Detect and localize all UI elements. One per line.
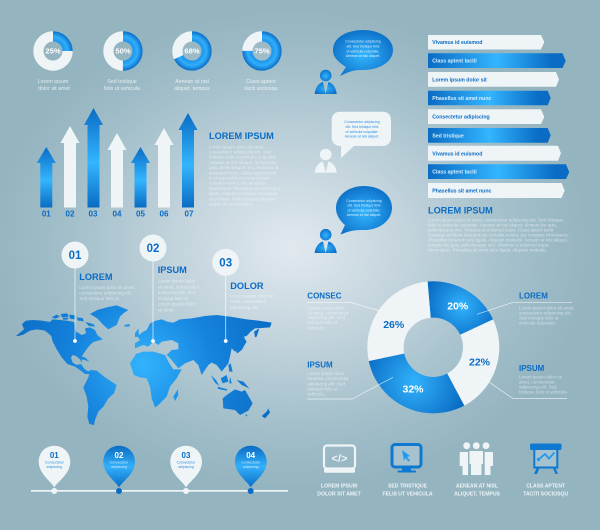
callout: consec: CONSEC <box>307 292 342 300</box>
icon: laptop code <box>317 446 362 498</box>
donut 25%: Lorem ipsum <box>38 79 69 85</box>
callout: ipsum left <box>307 360 393 399</box>
arrow chart <box>37 108 197 218</box>
text block: arrow chart description: Aenean at nisl aliquet, tempus leo <box>209 160 277 165</box>
map pin 03: 03 <box>219 257 232 269</box>
donut 50% <box>104 36 140 92</box>
callout: ipsum left: IPSUM <box>307 360 333 370</box>
ribbon 4: Phasellus sit amet nunc <box>432 96 492 102</box>
callout: lorem: Sed tristique felis ut <box>519 316 559 320</box>
callout: ipsum right: IPSUM <box>519 364 545 373</box>
blue speech bubble 2: Aenean at nisi aliquet. <box>347 213 381 217</box>
donut 68%: aliquet, tempus <box>174 86 210 92</box>
timeline pin 02: 02 <box>115 451 124 460</box>
timeline pin 03: adipiscing <box>178 465 194 469</box>
ribbon 9: Phasellus sit amet nunc <box>432 188 492 194</box>
arrow 01: 01 <box>42 210 51 218</box>
white speech bubble <box>332 112 391 158</box>
timeline pin 04: adipiscing <box>243 465 259 469</box>
blue speech bubble 1 <box>333 30 393 76</box>
ribbon 2: Class aptent taciti <box>432 58 477 64</box>
text block: arrow chart description: quis, pellentesque orci. Vivamus id <box>209 165 279 170</box>
blue speech bubble 2: ut vehicula vulputate. <box>348 208 380 212</box>
donut 25%: dolor sit amet <box>38 86 70 92</box>
text block: arrow chart description: sociosqu ad litora torquent per <box>209 176 270 180</box>
text block: arrow chart description: augue id sem porttitor. <box>209 202 254 206</box>
callout: lorem: LOREM <box>519 292 548 300</box>
icon: monitor cursor <box>382 444 433 498</box>
map pin 02: sit amet, consectetur <box>158 284 200 289</box>
map pin 02: Lorem ipsum dolor <box>158 302 195 307</box>
blue speech bubble 1: ut vehicula vulputate. <box>347 49 379 53</box>
map pin 01: consectetur adipiscing elit. <box>79 291 132 296</box>
icon: three people: AENEAN AT NISL <box>456 484 498 490</box>
blue speech bubble 2: elit. Sed tristique felis <box>347 204 381 208</box>
icon: presentation board <box>523 444 568 498</box>
donut 75%: taciti sociosqu <box>244 86 278 92</box>
donut 68%: 68% <box>184 47 200 56</box>
ribbon 6: Sed tristique <box>432 134 464 140</box>
arrow 03 <box>84 108 103 218</box>
text block: ribbon description: tempus leo quis, pellentesque orci. Vivamus id euismod turpis. <box>428 242 550 248</box>
callout: lorem: vehicula vulputate. <box>519 320 556 326</box>
callout: consec <box>307 292 380 330</box>
donut 25% <box>38 36 70 92</box>
icon: blue person 1 <box>315 70 337 94</box>
donut 25%: 25% <box>45 47 61 56</box>
arrow 06 <box>154 128 174 218</box>
map pin 01 <box>62 242 135 343</box>
callout: consec: sit amet, consectetur <box>307 310 349 315</box>
arrow 01 <box>37 147 56 218</box>
icon: three people: ALIQUET, TEMPUS <box>454 492 501 498</box>
icon: presentation board: TACITI SOCIOSQU <box>523 492 568 498</box>
donut chart <box>367 281 499 413</box>
arrow 02 <box>60 126 80 218</box>
callout: consec: tristique felis ut <box>307 320 338 325</box>
ribbon 7 <box>428 146 561 161</box>
map pin 03: adipiscing elit. <box>230 305 259 310</box>
callout: consec: Lorem ipsum dolor <box>307 306 345 310</box>
blue speech bubble 2 <box>336 186 392 234</box>
callout: lorem: consectetur adipiscing elit. <box>519 311 572 316</box>
arrow 04: 04 <box>113 210 122 218</box>
callout: lorem: Lorem ipsum dolor sit amet, <box>519 306 575 310</box>
icon: monitor cursor: FELIS UT VEHICULA <box>382 492 433 498</box>
ribbon 8 <box>428 164 569 179</box>
white speech bubble: Consectetur adipiscing <box>344 120 380 124</box>
icon: laptop code: DOLOR SIT AMET <box>317 492 362 498</box>
map pin 02 <box>140 234 200 343</box>
callout: ipsum right: adipiscing elit. Sed <box>519 385 557 390</box>
map: Americas and Greenland <box>16 305 130 425</box>
ribbon 1: Vivamus id euismod <box>432 40 482 46</box>
arrow 04 <box>108 133 126 218</box>
timeline pin 04: 04 <box>246 451 256 460</box>
map pin 03: DOLOR <box>230 281 264 291</box>
icon: white person <box>315 149 337 173</box>
callout: ipsum right: tristique felis ut vehicula <box>519 390 567 395</box>
icon: blue person 2 <box>315 229 337 253</box>
segment 22%: 22% <box>469 356 491 368</box>
text block: ribbon description: Himenaeos. Phasellus sit amet nunc ligula. Aliquam molestie. <box>428 248 547 252</box>
ribbon 3 <box>428 72 559 87</box>
timeline pin 01: Consectetur <box>45 461 65 465</box>
map pin 01: 01 <box>69 250 82 262</box>
arrow 07: 07 <box>185 210 194 218</box>
map pin 02: IPSUM <box>158 265 187 275</box>
text block: arrow chart description: ligula. Aliquam molestie accumsan <box>209 191 278 196</box>
white speech bubble: elit. Sed tristique felis <box>345 125 379 129</box>
timeline pin 04 <box>235 446 267 494</box>
map pin 02: 02 <box>147 243 159 255</box>
callout: ipsum left: Lorem ipsum dolor <box>307 371 345 376</box>
map pin 03: amet, consectetur <box>230 299 267 304</box>
arrow 03: 03 <box>89 210 98 218</box>
donut 50%: felis ut vehicula <box>104 86 140 92</box>
map pin 03 <box>212 249 274 343</box>
text block: arrow chart description: euismod turpis. Class aptent taciti <box>209 170 276 176</box>
blue speech bubble 1: Aenean at nisi aliquet. <box>346 54 380 58</box>
timeline pin 03: Consectetur <box>177 461 196 465</box>
callout: ipsum left: adipiscing elit. Sed <box>307 381 345 386</box>
blue speech bubble 1: elit. Sed tristique felis <box>346 44 380 48</box>
timeline pin 01: 01 <box>50 451 59 460</box>
text block: arrow chart description: accumsan. Pellentesque pharetra <box>209 196 277 202</box>
white speech bubble: ut vehicula vulputate. <box>346 130 378 134</box>
timeline pin 02: adipiscing <box>111 465 127 469</box>
callout: ipsum right: amet, consectetur <box>519 380 555 385</box>
icon: three people <box>454 442 501 498</box>
donut 50%: Sed tristique <box>107 79 137 85</box>
white speech bubble: Aenean at nisi aliquet. <box>345 134 379 138</box>
callout: ipsum left: tristique felis ut <box>307 386 338 391</box>
map pin 02: tristique felis ut. <box>158 296 189 301</box>
timeline pin 01 <box>39 446 70 494</box>
callout: ipsum left: vehicula. <box>307 391 325 396</box>
donut 68% <box>174 36 210 92</box>
map: Eurasia, Africa and Oceania <box>130 315 272 418</box>
map pin 02: adipiscing elit. Sed <box>158 290 196 295</box>
segment 20%: 20% <box>447 301 469 313</box>
arrow 05 <box>131 147 150 218</box>
icon: laptop code: LOREM IPSUM <box>321 484 357 490</box>
icon: laptop code: </> <box>332 453 347 465</box>
donut 75% <box>244 36 278 92</box>
ribbon 4 <box>428 91 551 105</box>
text block: ribbon description: Lorem ipsum dolor sit amet, consectetur adipiscing elit. Sed tristique <box>428 218 563 222</box>
world map <box>16 305 272 425</box>
ribbon 3: Lorem ipsum dolor sit <box>432 77 487 83</box>
text block: arrow chart description: tristique felis ut vehicula vulputate. <box>209 155 278 160</box>
icon: monitor cursor: SED TRISTIQUE <box>388 484 428 490</box>
map pin 01: Lorem ipsum dolor sit amet, <box>79 285 135 290</box>
arrow 07 <box>178 113 198 218</box>
icon: presentation board: CLASS APTENT <box>526 484 566 490</box>
timeline pin 03: 03 <box>182 451 191 460</box>
timeline pin 02: Consectetur <box>110 461 129 465</box>
ribbon 7: Vivamus id euismod <box>432 152 482 158</box>
ribbon 6 <box>428 128 551 143</box>
blue speech bubble 2: Consectetur adipiscing <box>346 199 382 203</box>
ribbon 8: Class aptent taciti <box>432 170 477 176</box>
text block: ribbon description: pellentesque orci. Vivamus id euismod turpis. Class aptent taciti <box>428 228 553 232</box>
map pin 02: sit amet. <box>158 308 175 312</box>
ribbon 9 <box>428 183 565 198</box>
arrow 05: 05 <box>136 210 145 218</box>
ribbon 1 <box>428 35 544 50</box>
segment 26%: 26% <box>383 319 405 331</box>
map pin 01: LOREM <box>79 272 113 282</box>
map pin 01: Sed tristique felis ut. <box>79 296 120 301</box>
timeline <box>31 446 288 494</box>
donut 75%: Class aptent <box>246 79 276 85</box>
callout: ipsum left: sit amet, consectetur <box>307 376 349 381</box>
text block: ribbon description <box>428 206 569 252</box>
map pin 03: Lorem ipsum dolor sit <box>230 294 274 298</box>
text block: ribbon description: felis ut vehicula vulputate. Aenean at nisl aliquet, tempus leo quis, <box>428 222 557 228</box>
arrow 02: 02 <box>66 210 75 218</box>
blue speech bubble 1: Consectetur adipiscing <box>345 40 381 44</box>
ribbon 5: Consectetur adipiscing <box>432 114 490 120</box>
callout: consec: adipiscing elit. Sed <box>307 315 345 320</box>
timeline pin 04: Consectetur <box>241 461 261 465</box>
text block: ribbon description: sociosqu ad litora torquent per conubia nostra, per inceptos himenaeos. <box>428 232 569 238</box>
timeline pin 02 <box>103 446 135 494</box>
text block: arrow chart description <box>209 131 282 206</box>
callout: ipsum right <box>482 364 567 398</box>
timeline pin 03 <box>170 446 202 494</box>
panel: ribbon list <box>428 35 569 198</box>
text block: ribbon description: LOREM IPSUM <box>428 206 493 216</box>
text block: arrow chart description: Lorem ipsum dolor sit amet, <box>209 144 265 150</box>
text block: arrow chart description: conubia nostra, per inceptos <box>209 180 266 186</box>
text block: arrow chart description: consectetur adipiscing elit. Sed <box>209 150 272 155</box>
timeline pin 01: adipiscing <box>47 465 62 469</box>
donut 50%: 50% <box>115 47 131 56</box>
segment 32%: 32% <box>402 384 424 396</box>
text block: arrow chart description: himenaeos. Phasellus sit amet nunc <box>209 186 282 191</box>
text block: ribbon description: Phasellus sit amet nunc ligula. Aliquam molestie. Aenean at nisl aliquet, <box>428 238 568 242</box>
ribbon 5 <box>428 109 544 124</box>
text block: arrow chart description: LOREM IPSUM <box>209 131 274 141</box>
donut 68%: Aenean at nisl <box>175 79 209 85</box>
callout: consec: vehicula. <box>307 326 325 330</box>
panel: percentage donuts <box>38 36 278 92</box>
panel: speech bubbles <box>315 30 393 253</box>
callout: ipsum right: Lorem ipsum dolor sit <box>519 374 563 380</box>
donut 75%: 75% <box>254 47 270 56</box>
arrow 06: 06 <box>160 210 169 218</box>
map pin 02: Lorem ipsum dolor <box>158 279 195 284</box>
callout: lorem <box>477 292 575 326</box>
ribbon 2 <box>428 53 566 68</box>
